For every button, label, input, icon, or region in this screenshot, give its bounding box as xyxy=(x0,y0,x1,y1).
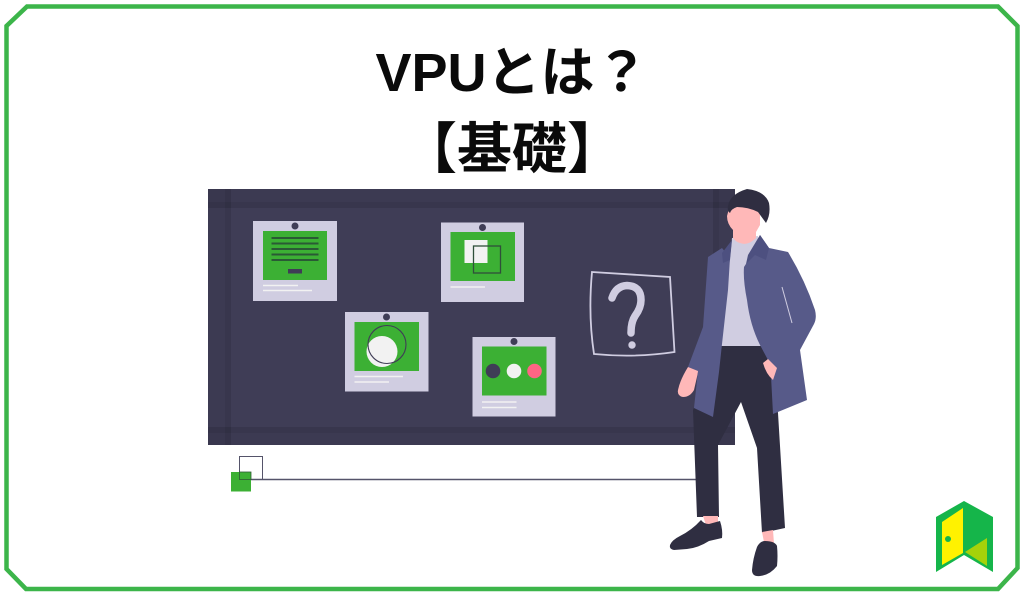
card: overlapping squares xyxy=(441,222,524,302)
coat left panel xyxy=(688,248,730,417)
sleeve crease xyxy=(782,287,792,323)
icon: logo door xyxy=(936,501,993,572)
card: three dots xyxy=(472,337,556,416)
hair xyxy=(728,189,770,223)
card: text document xyxy=(253,221,337,301)
connector line with squares xyxy=(231,456,696,492)
right hand in pocket xyxy=(763,359,777,380)
trousers xyxy=(693,343,785,533)
icon: question mark sketch xyxy=(590,272,674,356)
coat right panel xyxy=(744,235,816,414)
panel: dark board xyxy=(208,189,735,445)
sweater xyxy=(721,236,770,346)
figure: man in coat xyxy=(670,189,816,576)
shoes xyxy=(670,520,722,550)
title: VPUとは？: VPUとは？ xyxy=(375,43,649,103)
collar xyxy=(722,235,769,264)
left hand xyxy=(678,367,699,397)
neck and face xyxy=(727,205,760,244)
card: overlapping circles xyxy=(345,312,428,392)
ankles xyxy=(703,516,774,544)
heading: 【基礎】: 【基礎】 xyxy=(402,118,622,180)
